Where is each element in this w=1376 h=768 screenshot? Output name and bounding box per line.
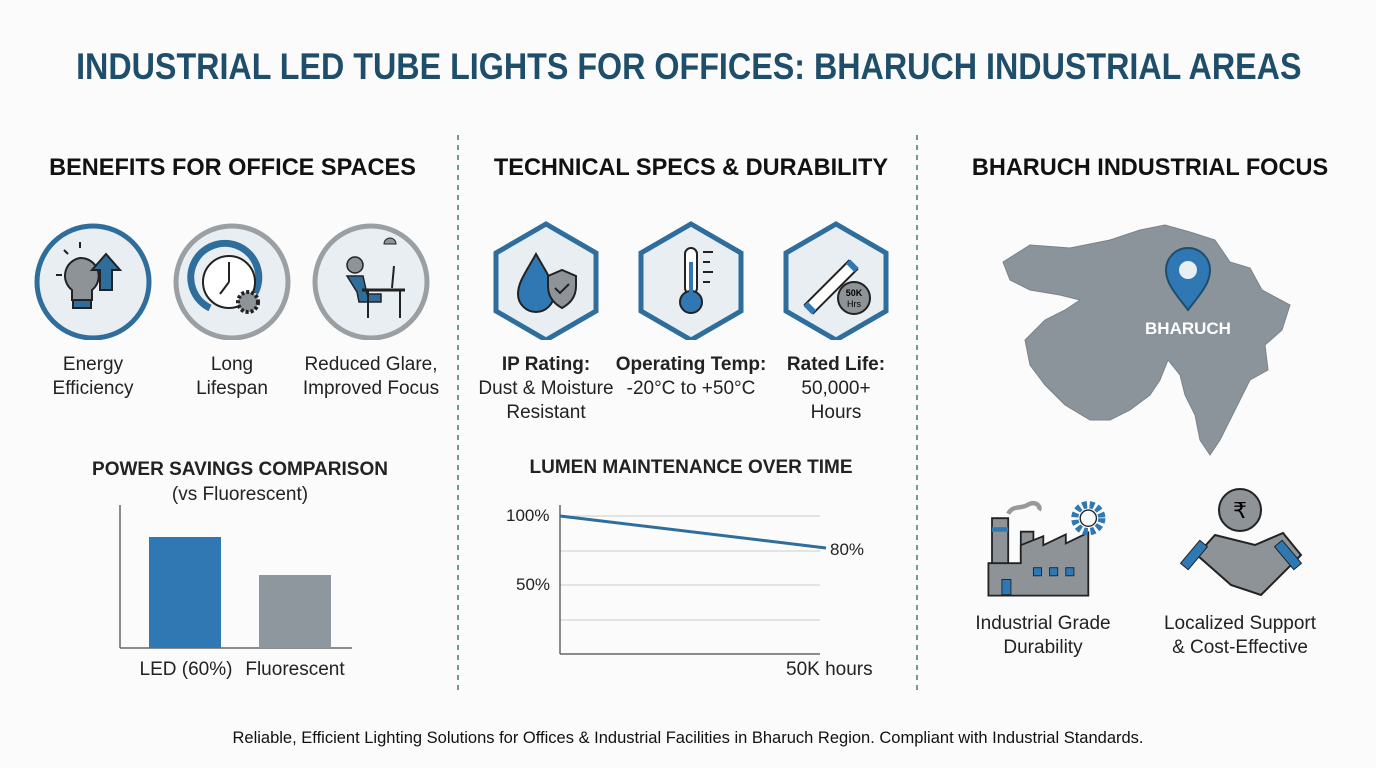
footer: Reliable, Efficient Lighting Solutions for Offices & Industrial Facilities in Bharuch Region. Compliant with Industrial Standards. xyxy=(232,729,1144,747)
panel: technical specs: 100% xyxy=(506,506,549,525)
panel: technical specs: -20°C to +50°C xyxy=(627,378,755,399)
line chart xyxy=(559,505,826,655)
panel: technical specs: Rated Life: xyxy=(787,354,885,375)
labels: specs: IP Rating: xyxy=(502,354,590,375)
panel: benefits xyxy=(34,154,439,680)
icons: hexagons: 50K xyxy=(846,288,863,298)
panel: technical specs xyxy=(478,154,888,680)
bar chart xyxy=(119,505,352,649)
heading: bharuch: BHARUCH INDUSTRIAL FOCUS xyxy=(972,154,1328,181)
labels: bharuch: Durability xyxy=(1003,637,1083,658)
labels: benefits xyxy=(53,354,134,399)
icons: benefits xyxy=(34,224,430,340)
chart title: power savings: POWER SAVINGS COMPARISON xyxy=(92,459,388,480)
icons: hexagons: Hrs xyxy=(847,299,861,309)
labels: specs xyxy=(478,354,614,423)
labels: bharuch: Industrial Grade xyxy=(975,613,1111,634)
heading: benefits: BENEFITS FOR OFFICE SPACES xyxy=(49,154,416,181)
panel: technical specs: Operating Temp: xyxy=(616,354,766,375)
chart title: lumen: LUMEN MAINTENANCE OVER TIME xyxy=(530,457,852,478)
panel: technical specs: 50,000+ xyxy=(801,378,871,399)
labels: bharuch xyxy=(975,613,1111,658)
icons: hexagons xyxy=(494,221,888,340)
chart title: power savings: (vs Fluorescent) xyxy=(172,484,308,505)
map: gujarat with pin: BHARUCH xyxy=(1145,319,1231,338)
panel: benefits: Long xyxy=(211,354,253,375)
labels: benefits: Energy xyxy=(63,354,123,375)
panel: technical specs: Hours xyxy=(811,402,861,423)
heading: specs: TECHNICAL SPECS & DURABILITY xyxy=(494,154,888,181)
panel: technical specs: 50% xyxy=(516,575,550,594)
panel: bharuch focus: Localized Support xyxy=(1164,613,1316,634)
title: INDUSTRIAL LED TUBE LIGHTS FOR OFFICES: BHARUCH INDUSTRIAL AREAS xyxy=(76,46,1302,87)
labels: specs: Dust & Moisture xyxy=(478,378,614,399)
panel: bharuch focus xyxy=(972,154,1328,658)
panel: benefits: Reduced Glare, xyxy=(304,354,438,375)
panel: benefits: Lifespan xyxy=(196,378,268,399)
panel: technical specs: 50K hours xyxy=(786,659,873,680)
labels: specs: Resistant xyxy=(506,402,586,423)
icons: factory and handshake: ₹ xyxy=(1233,499,1247,524)
panel: benefits: Fluorescent xyxy=(245,659,345,680)
icons: factory and handshake xyxy=(988,488,1302,596)
panel: technical specs: 80% xyxy=(830,540,864,559)
panel: bharuch focus: & Cost-Effective xyxy=(1172,637,1308,658)
panel: benefits: Improved Focus xyxy=(303,378,439,399)
chart title: power savings xyxy=(92,459,388,505)
map: gujarat with pin xyxy=(1002,224,1291,456)
panel: benefits: LED (60%) xyxy=(140,659,232,680)
labels: benefits: Efficiency xyxy=(53,378,133,399)
